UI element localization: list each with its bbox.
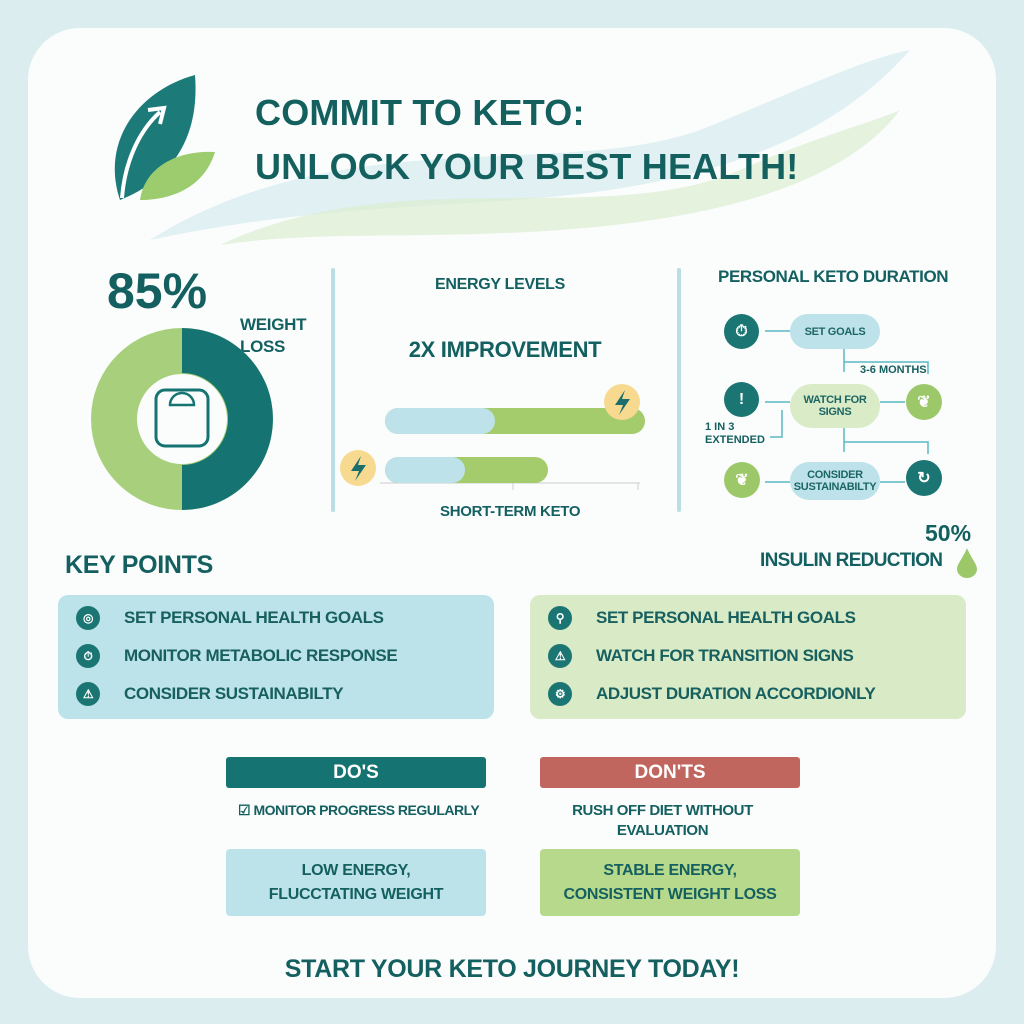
stat: insulin reduction: INSULIN REDUCTION xyxy=(760,550,942,571)
panel: don'ts xyxy=(540,757,800,916)
panel: personal keto duration flowchart: ❦ xyxy=(917,394,931,411)
icons: ⏱ xyxy=(735,322,748,340)
panel: energy levels xyxy=(340,276,645,520)
panel: personal keto duration flowchart: ↻ xyxy=(917,470,931,487)
panel: key points right xyxy=(530,595,966,719)
panel: personal keto duration flowchart: EXTENDED xyxy=(705,434,765,446)
title xyxy=(255,92,798,187)
panel: personal keto duration flowchart: WATCH FOR xyxy=(803,394,867,406)
title: COMMIT TO KETO: xyxy=(255,92,585,133)
panel: personal keto duration flowchart: SET GOALS xyxy=(805,326,865,338)
heading: key points: KEY POINTS xyxy=(65,551,213,579)
panel: personal keto duration flowchart: CONSIDER xyxy=(807,469,863,481)
donut chart xyxy=(91,328,273,510)
panel: key points right: ⚙ xyxy=(555,687,565,701)
panel: energy levels: SHORT-TERM KETO xyxy=(440,503,580,520)
title: UNLOCK YOUR BEST HEALTH! xyxy=(255,146,798,187)
panel: personal keto duration flowchart xyxy=(705,267,948,500)
panel: key points right: ADJUST DURATION ACCORDIONLY xyxy=(596,684,875,703)
panel: energy levels: ENERGY LEVELS xyxy=(435,276,565,293)
icons xyxy=(724,314,759,349)
panel: key points left: MONITOR METABOLIC RESPONSE xyxy=(124,646,397,665)
panel: key points left: ⚠ xyxy=(83,687,93,701)
panel: key points left: ⏱ xyxy=(84,648,92,662)
panel: key points right: ⚲ xyxy=(556,611,564,625)
footer call to action: START YOUR KETO JOURNEY TODAY! xyxy=(285,955,739,983)
decorative swoosh xyxy=(150,50,910,245)
panel: key points right: WATCH FOR TRANSITION SIGNS xyxy=(596,646,854,665)
panel: do's xyxy=(226,757,486,916)
panel: key points left: ◎ xyxy=(83,611,93,625)
stat: 85% weight loss: 85% xyxy=(107,263,207,319)
panel: personal keto duration flowchart: PERSONAL KETO DURATION xyxy=(718,267,948,286)
panel: energy levels: 2X IMPROVEMENT xyxy=(409,337,601,362)
stat: 85% weight loss: WEIGHT xyxy=(240,315,306,334)
stat: insulin reduction xyxy=(760,520,977,578)
panel: don'ts: EVALUATION xyxy=(617,822,708,839)
panel: key points right: SET PERSONAL HEALTH GOALS xyxy=(596,608,856,627)
panel: do's: LOW ENERGY, xyxy=(302,862,410,879)
panel: key points left xyxy=(58,595,494,719)
icon: leaves with arrow xyxy=(114,75,215,200)
panel: personal keto duration flowchart: 3-6 MONTHS xyxy=(860,364,927,376)
panel: personal keto duration flowchart: SUSTAINABILTY xyxy=(794,481,876,493)
bar chart xyxy=(340,384,645,490)
stat: 85% weight loss xyxy=(91,263,306,510)
stat: insulin reduction: 50% xyxy=(925,520,971,546)
panel: key points left: SET PERSONAL HEALTH GOALS xyxy=(124,608,384,627)
panel: key points left: CONSIDER SUSTAINABILTY xyxy=(124,684,343,703)
panel: do's: FLUCCTATING WEIGHT xyxy=(269,886,443,903)
dividers xyxy=(331,268,335,512)
panel: personal keto duration flowchart: SIGNS xyxy=(819,406,851,418)
panel: don'ts: RUSH OFF DIET WITHOUT xyxy=(572,802,753,819)
panel: don'ts: STABLE ENERGY, xyxy=(603,862,737,879)
stat: 85% weight loss: LOSS xyxy=(240,337,285,356)
panel: key points right: ⚠ xyxy=(555,649,565,663)
panel: don'ts: CONSISTENT WEIGHT LOSS xyxy=(564,886,776,903)
panel: personal keto duration flowchart: ❦ xyxy=(735,472,749,489)
panel: don'ts: DON'TS xyxy=(634,762,706,783)
panel: do's: ☑ MONITOR PROGRESS REGULARLY xyxy=(238,802,479,818)
panel: personal keto duration flowchart: ! xyxy=(739,390,744,408)
panel: do's: DO'S xyxy=(333,762,379,783)
panel: personal keto duration flowchart: 1 IN 3 xyxy=(705,421,734,433)
